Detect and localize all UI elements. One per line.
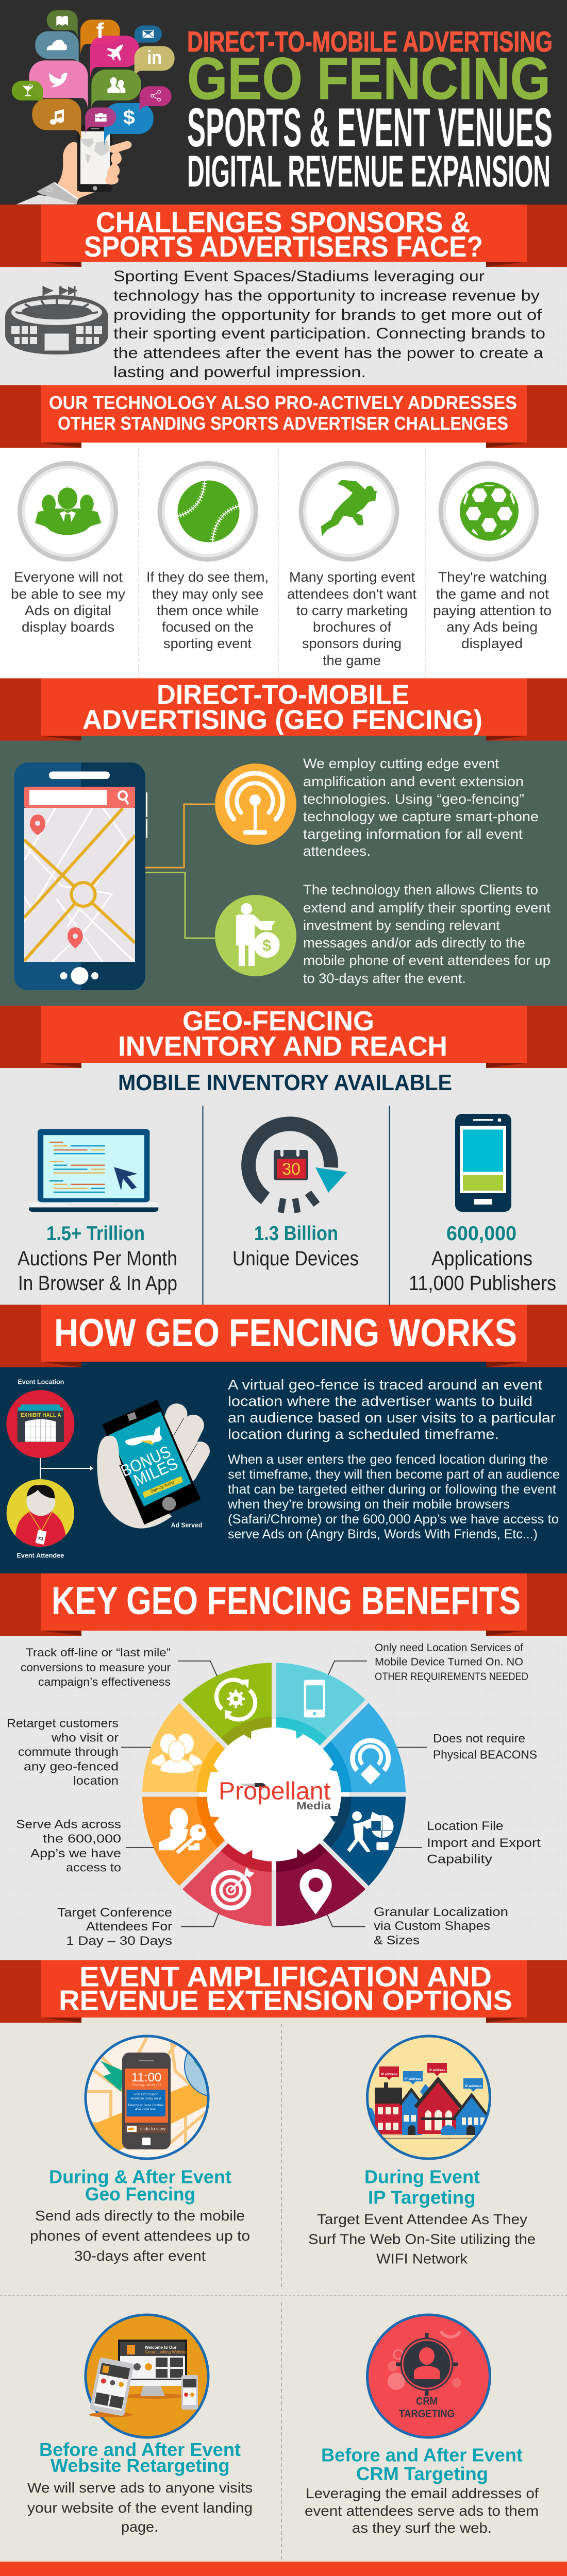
text: challenge three xyxy=(287,569,416,668)
banner: inventory heading: GEO-FENCING xyxy=(182,1006,374,1037)
text: challenge two: If they do see them, xyxy=(146,569,269,585)
text: virtual geo-fence paragraph: A virtual geo-fence is traced around an event xyxy=(228,1377,542,1393)
label: retarget customers xyxy=(7,1717,119,1787)
label: serve ads: access to xyxy=(66,1861,121,1874)
icon: thirty day cycle: 30 xyxy=(282,1160,301,1178)
text: geo fencing option: Send ads directly to the mobile xyxy=(35,2208,245,2224)
icon: thirty day cycle xyxy=(248,1124,347,1206)
stat: auctions: Auctions Per Month xyxy=(18,1247,177,1270)
label: target attendees: Target Conference xyxy=(57,1906,172,1920)
text: challenge one: be able to see my xyxy=(11,586,126,602)
text: IP targeting option xyxy=(308,2166,536,2267)
icon: houses with IP address tags xyxy=(367,2036,491,2159)
icon: geo fencing phone on map: 11:00 xyxy=(131,2071,161,2084)
text: extension paragraph: messages and/or ads directly to the xyxy=(303,935,525,951)
text: CRM targeting option: as they surf the web. xyxy=(352,2520,492,2536)
banner: inventory heading xyxy=(0,1006,567,1068)
icon: geo fencing phone on map: 454 22nd Ave. xyxy=(135,2108,157,2111)
icon: person with puzzle bulb xyxy=(347,1811,394,1852)
text: challenge one: display boards xyxy=(22,619,114,635)
icon: geo fencing phone on map: slide to view xyxy=(140,2126,166,2131)
text: IP targeting option: Surf The Web On-Site utilizing the xyxy=(308,2231,536,2247)
text: geo fencing option: 30-days after event xyxy=(74,2248,206,2264)
stat: devices: 1.3 Billion xyxy=(254,1223,338,1245)
bubble icons: $ xyxy=(123,107,135,129)
icon: person with money bag: $ xyxy=(262,936,271,954)
text block: intro paragraph: providing the opportunity for brands to get more out of xyxy=(113,307,542,324)
icon: CRM targeting crosshair: TARGETING xyxy=(399,2408,455,2420)
icon: geo fencing phone on map: Thursday, January 23 xyxy=(131,2083,161,2087)
label: target attendees: 1 Day – 30 Days xyxy=(66,1934,172,1948)
logo: Propellant Media: Media xyxy=(296,1800,331,1812)
label: serve ads: App’s we have xyxy=(30,1846,121,1860)
banner: amplification heading xyxy=(0,1960,567,2023)
text: extension paragraph: mobile phone of event attendees for up xyxy=(303,953,551,968)
banner: challenges heading: SPORTS ADVERTISERS FACE? xyxy=(84,230,483,263)
label: track conversions: campaign’s effectiveness xyxy=(38,1675,171,1688)
panel: key benefits xyxy=(0,1636,567,1960)
banner: amplification heading: EVENT AMPLIFICATION AND xyxy=(79,1961,492,1993)
icon: audience xyxy=(152,1734,202,1774)
text: audience paragraph: serve Ads on (Angry Birds, Words With Friends, Etc...) xyxy=(228,1527,538,1541)
text: IP targeting option: IP Targeting xyxy=(368,2187,475,2208)
panel: inventory and reach xyxy=(0,1068,567,1305)
panel: challenges intro xyxy=(0,267,567,385)
bubbles xyxy=(12,10,175,146)
label: granular localization xyxy=(374,1905,508,1947)
icon: houses with IP address tags: IP address xyxy=(405,2077,422,2081)
text: challenge two: sporting event xyxy=(163,636,252,651)
label: location file xyxy=(427,1819,541,1866)
text: geo fencing option: phones of event attendees up to xyxy=(30,2228,250,2244)
banner: challenges heading xyxy=(0,205,567,267)
text: amplification paragraph: targeting information for all event xyxy=(303,826,523,842)
text: CRM targeting option: event attendees serve ads to them xyxy=(305,2503,539,2519)
label: target attendees xyxy=(57,1906,172,1948)
text: extension paragraph: investment by sending relevant xyxy=(303,918,501,933)
stat: applications: 600,000 xyxy=(446,1223,516,1245)
text: website retargeting option: Before and After Event xyxy=(39,2439,241,2460)
banner: direct-to-mobile heading: ADVERTISING (GEO FENCING) xyxy=(82,705,482,735)
title xyxy=(187,25,553,196)
text: challenge one: Ads on digital xyxy=(25,603,111,618)
label: retarget customers: Retarget customers xyxy=(7,1717,119,1730)
text block: intro paragraph: lasting and powerful impression. xyxy=(113,364,366,381)
banner: amplification heading: REVENUE EXTENSION OPTIONS xyxy=(59,1985,512,2016)
chart: benefits wheel xyxy=(141,1662,407,1927)
panel: how geo fencing works xyxy=(0,1367,567,1573)
label: location services: Mobile Device Turned On. NO xyxy=(375,1656,523,1668)
label: serve ads xyxy=(16,1818,121,1874)
icon: geo fencing phone on map: Nearby at Bane Clothes xyxy=(128,2104,164,2107)
text block: intro paragraph: the attendees after the event has the power to create a xyxy=(113,345,544,362)
icon: phone with map xyxy=(14,762,147,990)
icon: antenna signal xyxy=(215,764,296,845)
panel: direct-to-mobile explanation xyxy=(0,740,567,1006)
panel: standing challenges xyxy=(0,443,567,679)
text: challenge three: sponsors during xyxy=(302,636,402,651)
text: challenge two: they may only see xyxy=(152,586,263,602)
icon: mobile phone xyxy=(304,1680,325,1717)
icon: business people xyxy=(20,464,115,560)
icon: website retargeting devices: Great Looking Website xyxy=(145,2350,187,2354)
label: no beacons xyxy=(433,1732,537,1761)
text: virtual geo-fence paragraph: location where the advertiser wants to build xyxy=(228,1393,532,1409)
stat: auctions: 1.5+ Trillion xyxy=(46,1223,145,1245)
text: challenge three: attendees don't want xyxy=(287,586,416,602)
text block: intro paragraph: technology has the opportunity to increase revenue by xyxy=(113,287,540,304)
text: extension paragraph: extend and amplify their sporting event xyxy=(303,900,551,916)
banner: how it works heading xyxy=(0,1304,567,1367)
banner: direct-to-mobile heading: DIRECT-TO-MOBILE xyxy=(157,680,409,710)
text: website retargeting option: page. xyxy=(121,2519,158,2535)
logo: Propellant Media: Propellant xyxy=(219,1777,330,1805)
icon: target xyxy=(213,1867,255,1908)
bubble icons: in xyxy=(147,47,162,68)
icon: hand with phone ad xyxy=(97,1400,201,1529)
label: event attendee: Event Attendee xyxy=(16,1552,64,1559)
label: no beacons: Physical BEACONS xyxy=(433,1748,537,1761)
icon: stadium xyxy=(5,286,108,354)
icon: runner xyxy=(301,464,397,560)
label: retarget customers: any geo-fenced xyxy=(24,1760,119,1773)
text: challenge three: the game xyxy=(323,653,381,668)
text: challenge four: the game and not xyxy=(436,586,549,602)
label: no beacons: Does not require xyxy=(433,1732,525,1745)
icon: map pin xyxy=(299,1869,332,1914)
label: location file: Location File xyxy=(427,1819,503,1833)
text: challenge four: displayed xyxy=(461,636,523,651)
icon: houses with IP address tags: IP address xyxy=(429,2069,446,2072)
connector: green xyxy=(145,873,215,938)
label: serve ads: the 600,000 xyxy=(43,1832,121,1845)
icon: CRM targeting crosshair: CRM xyxy=(416,2396,438,2407)
label: location services: Only need Location Services of xyxy=(375,1642,523,1654)
icon: smartphone xyxy=(455,1114,511,1212)
text: challenge three: to carry marketing xyxy=(296,603,408,618)
stat: devices: Unique Devices xyxy=(232,1247,359,1270)
icon: geo fencing phone on map: available today only! xyxy=(131,2097,161,2100)
icon: hand with phone ad: MILES xyxy=(130,1454,180,1490)
text: CRM targeting option: CRM Targeting xyxy=(356,2463,488,2484)
text: challenge four: paying attention to xyxy=(433,603,552,618)
footer xyxy=(0,2562,567,2576)
text: geo fencing option xyxy=(30,2166,250,2264)
icon: gear with arrows xyxy=(216,1679,255,1720)
text: geo fencing option: During & After Event xyxy=(49,2166,231,2188)
text: audience paragraph: when they’re browsing on their mobile browsers xyxy=(227,1497,510,1512)
banner: technology heading xyxy=(0,385,567,448)
diagram: location, attendee and served ad xyxy=(6,1379,202,1559)
icon: houses with IP address tags: IP address xyxy=(465,2084,482,2088)
text: IP targeting option: During Event xyxy=(364,2166,480,2188)
label: granular localization: Granular Localization xyxy=(374,1905,508,1919)
label: granular localization: via Custom Shapes xyxy=(374,1919,490,1933)
text block: intro paragraph xyxy=(113,268,545,381)
text: amplification paragraph xyxy=(303,756,539,859)
stat: applications: Applications xyxy=(431,1247,532,1270)
stat: auctions: In Browser & In App xyxy=(18,1272,177,1295)
icon: soccer ball xyxy=(441,464,537,560)
text: amplification paragraph: technology we capture smart-phone xyxy=(303,809,539,824)
stat: devices xyxy=(232,1223,359,1270)
bubble icons xyxy=(22,16,162,129)
icon: hand with phone ad: Sign Up Today xyxy=(150,1480,175,1494)
icon: beacon xyxy=(353,1740,388,1785)
banner: technology heading: OUR TECHNOLOGY ALSO PRO-ACTIVELY ADDRESSES xyxy=(49,392,517,413)
banner: inventory heading: INVENTORY AND REACH xyxy=(118,1031,447,1062)
banner: benefits heading xyxy=(0,1573,567,1636)
illustration: hand holding phone with app bubbles xyxy=(12,10,175,205)
text: amplification paragraph: technologies. Using “geo-fencing” xyxy=(303,791,524,807)
label: track conversions: Track off-line or “last mile” xyxy=(26,1646,171,1659)
text: challenge two xyxy=(146,569,269,651)
icon: exhibit hall: EXHIBIT HALL A xyxy=(21,1412,61,1418)
text: website retargeting option xyxy=(27,2439,253,2535)
icon: hand with phone ad: BONUS xyxy=(118,1442,173,1480)
text: website retargeting option: We will serve ads to anyone visits xyxy=(27,2480,253,2496)
icon: geo fencing phone on map xyxy=(85,2035,209,2160)
text: challenge three: brochures of xyxy=(313,619,391,635)
banner: technology heading: OTHER STANDING SPORTS ADVERTISER CHALLENGES xyxy=(58,413,508,434)
label: retarget customers: location xyxy=(73,1774,119,1787)
text: audience paragraph: set timeframe, they will then become part of an audience xyxy=(228,1467,560,1482)
heading: mobile inventory available: MOBILE INVENTORY AVAILABLE xyxy=(118,1070,452,1095)
text: CRM targeting option: Leveraging the email addresses of xyxy=(306,2485,539,2501)
text block: intro paragraph: Sporting Event Spaces/Stadiums leveraging our xyxy=(113,268,485,285)
icon: website retargeting devices: Welcome to Our xyxy=(145,2345,176,2350)
text: amplification paragraph: attendees. xyxy=(303,843,371,859)
text: audience paragraph: that can be targeted either during or following the event xyxy=(228,1482,556,1497)
icon: houses with IP address tags: IP address xyxy=(381,2073,398,2076)
label: location services: OTHER REQUIREMENTS NEEDED xyxy=(375,1671,528,1683)
text: challenge two: focused on the xyxy=(162,619,254,635)
text: extension paragraph: to 30-days after the event. xyxy=(303,971,466,986)
icon: person with money bag xyxy=(215,895,296,976)
text: audience paragraph: When a user enters the geo fenced location during the xyxy=(228,1452,548,1467)
text: virtual geo-fence paragraph: location during a scheduled timeframe. xyxy=(228,1426,499,1442)
label: track conversions: conversions to measure your xyxy=(21,1661,171,1674)
label: target attendees: Attendees For xyxy=(86,1920,172,1934)
text: extension paragraph: The technology then allows Clients to xyxy=(303,882,538,897)
label: location file: Capability xyxy=(427,1853,493,1866)
label: serve ads: Serve Ads across xyxy=(16,1818,121,1831)
text: IP targeting option: Target Event Attendee As They xyxy=(317,2211,527,2227)
panel: amplification options xyxy=(0,2023,567,2562)
icon: attendee xyxy=(7,1479,74,1547)
text block: intro paragraph: their sporting event participation. Connecting brands to xyxy=(113,325,545,342)
text: challenge four xyxy=(433,569,552,651)
label: ad served: Ad Served xyxy=(171,1522,202,1529)
header panel xyxy=(0,0,567,205)
text: challenge one: Everyone will not xyxy=(14,569,123,585)
text: extension paragraph xyxy=(303,882,551,986)
banner: challenges heading: CHALLENGES SPONSORS & xyxy=(96,206,470,239)
text: challenge one xyxy=(11,569,126,635)
text: virtual geo-fence paragraph: an audience based on user visits to a particular xyxy=(228,1410,556,1426)
text: challenge three: Many sporting event xyxy=(289,569,415,585)
text: website retargeting option: your website of the event landing xyxy=(27,2500,253,2516)
text: amplification paragraph: We employ cutting edge event xyxy=(303,756,499,771)
text: CRM targeting option: Before and After Event xyxy=(321,2444,523,2466)
text: IP targeting option: WIFI Network xyxy=(376,2250,468,2267)
icon: exhibit hall xyxy=(6,1390,74,1458)
text: challenge two: them once while xyxy=(157,603,259,618)
text: audience paragraph: (Safari/Chrome) or the 600,000 App’s we have access to xyxy=(228,1512,559,1527)
label: track conversions xyxy=(21,1646,171,1688)
banner: direct-to-mobile heading xyxy=(0,678,567,741)
label: event location: Event Location xyxy=(18,1379,64,1386)
text: CRM targeting option xyxy=(305,2444,539,2536)
text: amplification paragraph: amplification and event extension xyxy=(303,774,524,789)
bubble icons: f xyxy=(96,19,104,43)
label: granular localization: & Sizes xyxy=(374,1934,420,1947)
text: virtual geo-fence paragraph xyxy=(228,1377,556,1442)
connector: orange xyxy=(145,804,215,868)
icon: person with key xyxy=(159,1808,206,1853)
icon: baseball xyxy=(160,464,256,560)
text: audience paragraph xyxy=(227,1452,560,1541)
icon: attendee: X1 xyxy=(38,1535,44,1541)
text: website retargeting option: Website Retargeting xyxy=(51,2455,230,2476)
label: location file: Import and Export xyxy=(427,1836,541,1850)
icon: CRM targeting crosshair xyxy=(367,2315,490,2437)
icon: geo fencing phone on map: 50% Off Coupon xyxy=(134,2093,158,2096)
label: location services xyxy=(375,1642,528,1683)
icon: laptop xyxy=(29,1129,158,1212)
icon: website retargeting devices xyxy=(86,2315,208,2437)
label: retarget customers: who visit or xyxy=(51,1731,119,1744)
label: retarget customers: commute through xyxy=(18,1745,119,1758)
text: geo fencing option: Geo Fencing xyxy=(85,2183,195,2205)
stat: auctions xyxy=(18,1223,177,1295)
stat: applications xyxy=(409,1223,556,1295)
text: challenge four: any Ads being xyxy=(446,619,538,635)
text: challenge four: They're watching xyxy=(438,569,547,585)
